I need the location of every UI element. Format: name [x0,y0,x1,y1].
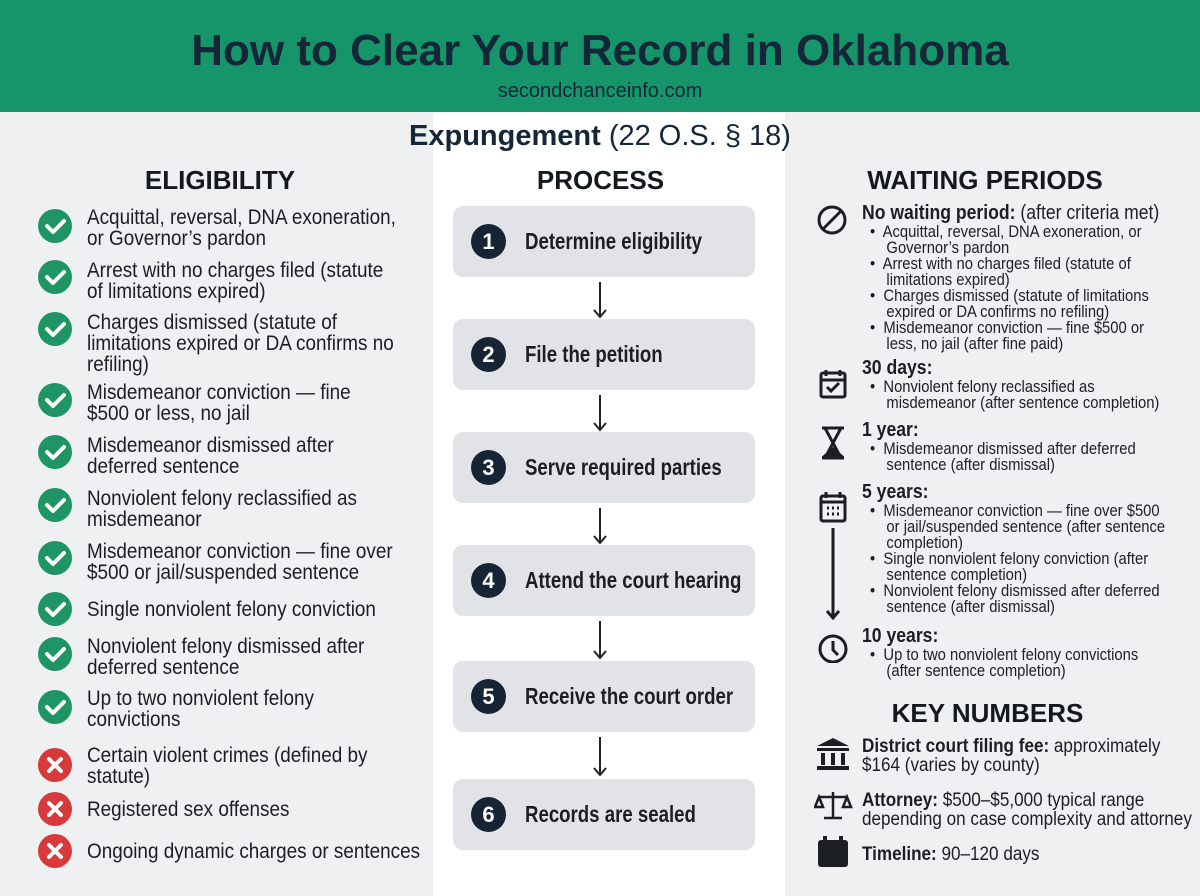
title: How to Clear Your Record in Oklahoma [191,26,1009,75]
panel: eligibility: Nonviolent felony reclassified as [87,487,357,510]
heading: key numbers: KEY NUMBERS [892,698,1083,728]
heading: eligibility: ELIGIBILITY [145,165,295,195]
step 6 [453,779,755,850]
panel: eligibility: Certain violent crimes (defined by [87,744,367,767]
panel: waiting periods: • Nonviolent felony reclassified as [870,377,1095,396]
panel: eligibility: Up to two nonviolent felony [87,687,314,710]
panel: waiting periods: • Acquittal, reversal, DNA exoneration, or [870,222,1142,241]
step 5 [453,661,755,732]
website: secondchanceinfo.com [498,80,702,102]
panel: eligibility: deferred sentence [87,656,239,679]
panel: eligibility: of limitations expired) [87,280,266,303]
panel: process steps [453,206,755,850]
panel: waiting periods: • Single nonviolent felony conviction (after [870,549,1148,568]
step 6: 6 [482,802,495,827]
panel: eligibility: refiling) [87,353,149,376]
panel: waiting periods: limitations expired) [886,270,1010,289]
panel: waiting periods: • Misdemeanor dismissed after deferred [870,439,1136,458]
panel: waiting periods: expired or DA confirms no refiling) [886,302,1109,321]
panel: eligibility: Charges dismissed (statute of [87,311,337,334]
panel: eligibility: Acquittal, reversal, DNA exoneration, [87,206,396,229]
panel: eligibility: misdemeanor [87,508,202,531]
panel: eligibility: Registered sex offenses [87,798,289,821]
panel: waiting periods: (after sentence completion) [886,661,1066,680]
panel: waiting periods: misdemeanor (after sentence completion) [886,393,1159,412]
panel: key numbers: $164 (varies by county) [862,755,1040,776]
panel: eligibility: statute) [87,765,150,788]
panel: eligibility: limitations expired or DA confirms no [87,332,394,355]
step 3: Serve required parties [525,454,722,480]
panel: waiting periods: or jail/suspended sentence (after sentence [886,517,1165,536]
panel: key numbers: depending on case complexity and attorney [862,809,1192,830]
panel: waiting periods: Governor’s pardon [886,238,1009,257]
panel: eligibility: Nonviolent felony dismissed after [87,635,364,658]
panel: eligibility: $500 or jail/suspended sentence [87,561,359,584]
panel: eligibility: or Governor’s pardon [87,227,266,250]
panel: waiting periods: No waiting period: (after criteria met) [862,202,1159,224]
step 3: 3 [482,455,495,480]
center column background [433,112,785,896]
panel: waiting periods: • Charges dismissed (statute of limitations [870,286,1149,305]
panel: eligibility: $500 or less, no jail [87,402,250,425]
panel: eligibility: Single nonviolent felony conviction [87,598,376,621]
panel: waiting periods: less, no jail (after fine paid) [886,334,1063,353]
step 5: 5 [482,684,495,709]
panel: waiting periods: completion) [886,533,963,552]
heading: waiting periods: WAITING PERIODS [867,165,1103,195]
panel: waiting periods: 30 days: [862,357,932,379]
panel: waiting periods: 10 years: [862,625,938,647]
step 2: 2 [482,342,495,367]
step 1: Determine eligibility [525,228,702,254]
panel: waiting periods: sentence completion) [886,565,1027,584]
panel: waiting periods: sentence (after dismissal) [886,455,1055,474]
panel: waiting periods [818,202,1165,680]
panel: waiting periods: • Misdemeanor conviction — fine over $500 [870,501,1160,520]
panel: eligibility: deferred sentence [87,455,239,478]
panel: eligibility: convictions [87,708,181,731]
panel: eligibility: Arrest with no charges filed (statute [87,259,383,282]
step 1: 1 [482,229,495,254]
step 5: Receive the court order [525,683,733,709]
panel: eligibility [38,206,420,868]
step 6: Records are sealed [525,801,696,827]
step 2 [453,319,755,390]
panel: eligibility: Misdemeanor conviction — fine [87,381,351,404]
panel: key numbers: District court filing fee: approximately [862,736,1160,757]
arrows [593,282,607,776]
step 4 [453,545,755,616]
panel: waiting periods: sentence (after dismissal) [886,597,1055,616]
step 4: 4 [482,568,495,593]
panel: eligibility: Misdemeanor dismissed after [87,434,334,457]
header banner [0,0,1200,112]
heading: process: PROCESS [537,165,664,195]
panel: waiting periods: 1 year: [862,419,919,441]
panel: waiting periods: • Arrest with no charges filed (statute of [870,254,1131,273]
panel: waiting periods: • Up to two nonviolent felony convictions [870,645,1138,664]
panel: eligibility: Misdemeanor conviction — fine over [87,540,393,563]
panel: waiting periods: 5 years: [862,481,929,503]
panel: waiting periods: • Misdemeanor conviction — fine $500 or [870,318,1144,337]
subtitle: Expungement (22 O.S. § 18) [409,120,791,152]
step 3 [453,432,755,503]
panel: eligibility: Ongoing dynamic charges or sentences [87,840,420,863]
panel: key numbers: Attorney: $500–$5,000 typical range [862,790,1144,811]
step 4: Attend the court hearing [525,567,741,593]
step 1 [453,206,755,277]
step 2: File the petition [525,341,663,367]
panel: waiting periods: • Nonviolent felony dismissed after deferred [870,581,1160,600]
panel: key numbers: Timeline: 90–120 days [862,844,1039,865]
panel: key numbers [814,736,1192,867]
